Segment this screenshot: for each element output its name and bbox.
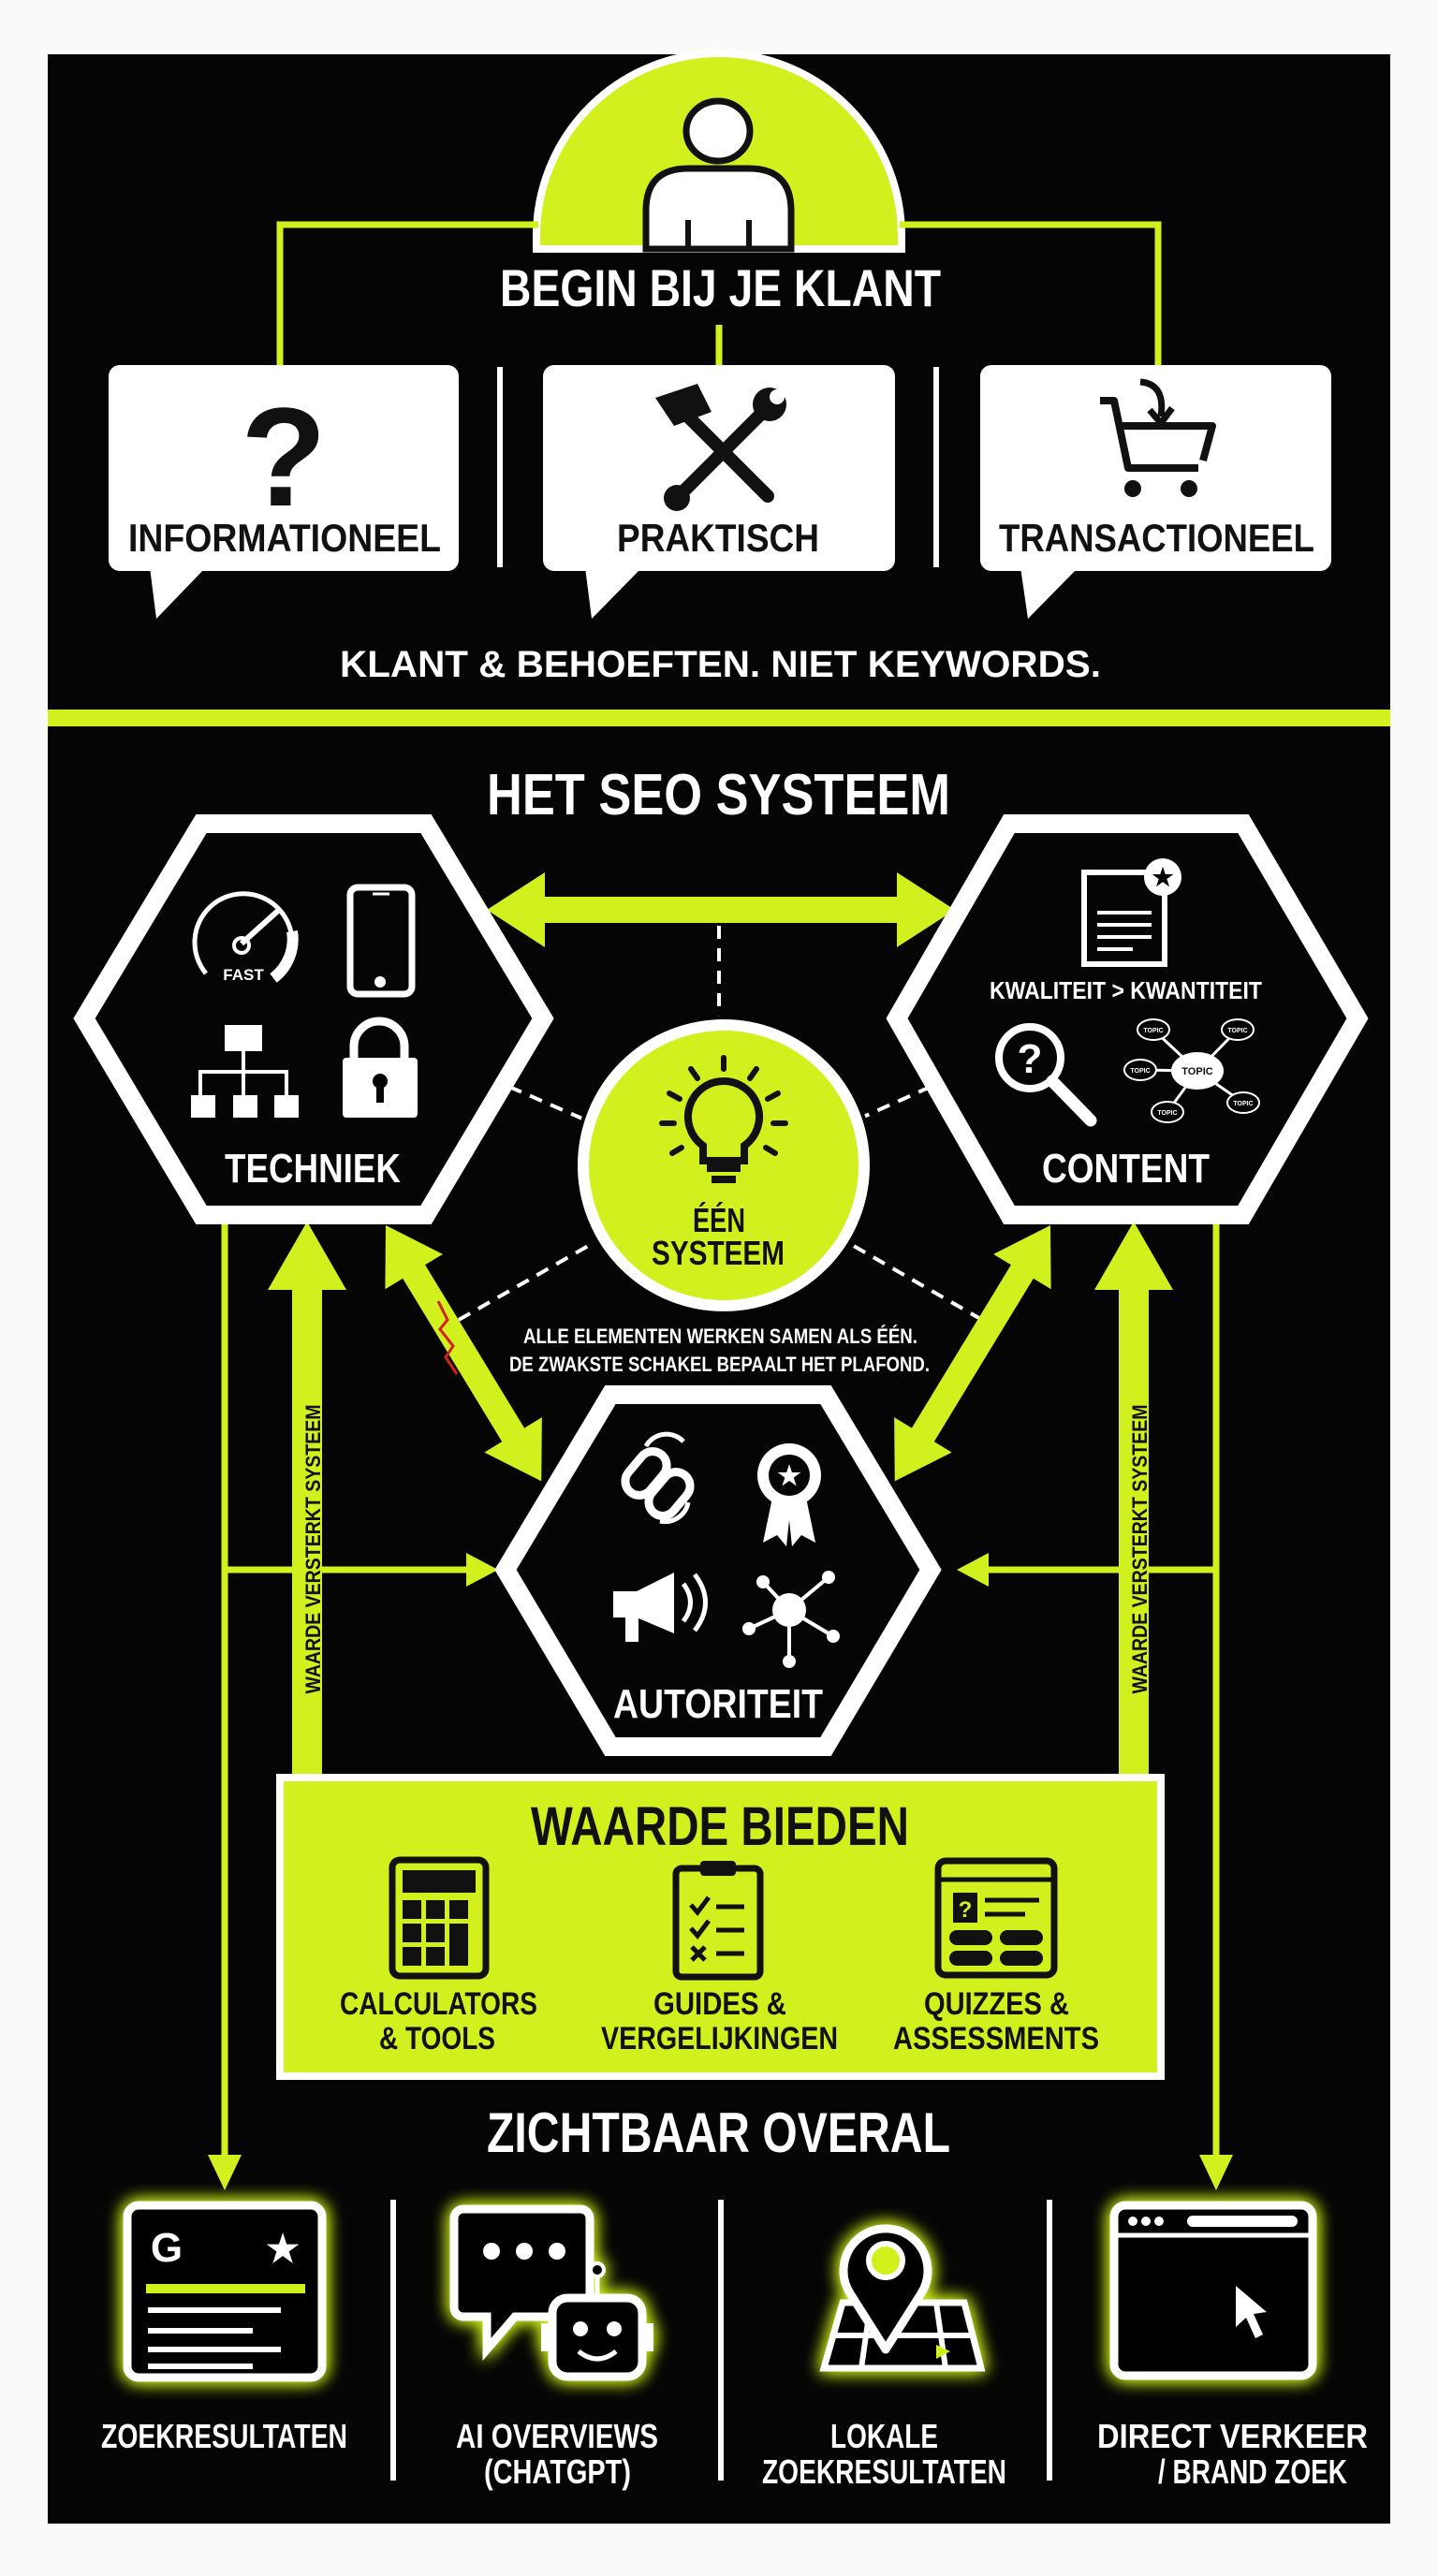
icon: speedometer — [195, 894, 293, 984]
system caption — [509, 1325, 930, 1376]
hexagon: content: KWALITEIT > KWANTITEIT — [990, 976, 1262, 1004]
waarde up arrow left — [268, 1222, 346, 1783]
system caption: ALLE ELEMENTEN WERKEN SAMEN ALS ÉÉN. — [523, 1325, 917, 1348]
panel: waarde bieden: QUIZZES & — [924, 1986, 1069, 2022]
hexagon: content: CONTENT — [1042, 1146, 1210, 1192]
icon: light bulb — [662, 1058, 785, 1183]
hexagon: content — [897, 824, 1357, 1215]
bottom labels: LOKALE — [830, 2417, 938, 2455]
icon: quiz screen — [938, 1861, 1054, 1975]
icon: phone — [350, 887, 412, 994]
panel: waarde bieden — [280, 1778, 1161, 2076]
hexagon: techniek: TECHNIEK — [225, 1146, 401, 1192]
bottom labels: / BRAND ZOEK — [1158, 2452, 1347, 2491]
icon: local map pin — [824, 2229, 981, 2368]
panel: waarde bieden: CALCULATORS — [340, 1986, 537, 2022]
icon: topic cluster: TOPIC — [1157, 1110, 1178, 1117]
heading: zichtbaar overal: ZICHTBAAR OVERAL — [487, 2101, 950, 2164]
icon: ai chat robot — [454, 2209, 653, 2377]
center circle: één systeem — [574, 1016, 873, 1315]
panel: waarde bieden: & TOOLS — [379, 2021, 495, 2056]
icon: megaphone — [613, 1573, 706, 1642]
icon: magnifier question — [999, 1027, 1091, 1120]
waarde up arrow right — [1094, 1222, 1173, 1783]
card: informationeel: INFORMATIONEEL — [128, 516, 441, 560]
icon: topic cluster: TOPIC — [1233, 1101, 1254, 1107]
center circle: één systeem: ÉÉN — [693, 1201, 745, 1239]
icon: link — [620, 1434, 696, 1522]
icon: document star: ★ — [1152, 863, 1174, 891]
panel: waarde bieden: VERGELIJKINGEN — [601, 2021, 838, 2056]
bottom labels: DIRECT VERKEER — [1097, 2417, 1368, 2455]
bottom labels: ZOEKRESULTATEN — [101, 2417, 347, 2455]
hexagon: techniek — [84, 824, 543, 1215]
arrow: content-autoriteit double — [866, 1208, 1079, 1499]
icon: quiz screen: ? — [959, 1897, 972, 1923]
icon: search results: G — [151, 2225, 183, 2271]
center circle: één systeem: SYSTEEM — [652, 1234, 785, 1272]
panel: waarde bieden: WAARDE BIEDEN — [531, 1796, 909, 1857]
thin side lines with arrows — [208, 1217, 1233, 2190]
icon: browser cursor — [1114, 2205, 1313, 2376]
card: transactioneel — [980, 365, 1331, 619]
icon: topic cluster: TOPIC — [1130, 1068, 1151, 1075]
bottom labels: ZOEKRESULTATEN — [762, 2452, 1006, 2491]
heading: het seo systeem: HET SEO SYSTEEM — [487, 763, 950, 827]
icon: lock — [343, 1021, 418, 1118]
icon: topic cluster: TOPIC — [1143, 1028, 1164, 1034]
card: praktisch: PRAKTISCH — [617, 516, 819, 560]
hexagon: autoriteit: AUTORITEIT — [613, 1681, 823, 1727]
bottom labels — [101, 2417, 1368, 2491]
panel: waarde bieden: ASSESSMENTS — [893, 2021, 1099, 2056]
card: transactioneel: TRANSACTIONEEL — [999, 516, 1314, 560]
dashed connector lines — [459, 926, 982, 1320]
icon: award badge — [757, 1443, 821, 1546]
tagline: KLANT & BEHOEFTEN. NIET KEYWORDS. — [340, 644, 1101, 685]
icon: award badge: ★ — [777, 1461, 801, 1490]
heading: begin bij je klant: BEGIN BIJ JE KLANT — [500, 258, 941, 317]
connector lines top — [280, 225, 1158, 365]
icon: search results: ★ — [266, 2229, 300, 2270]
dividers bottom — [393, 2200, 1049, 2481]
icon: search results — [127, 2205, 322, 2378]
system caption: DE ZWAKSTE SCHAKEL BEPAALT HET PLAFOND. — [509, 1353, 930, 1376]
crack mark — [438, 1301, 457, 1374]
waarde up arrow right: WAARDE VERSTERKT SYSTEEM — [1128, 1404, 1152, 1694]
icon: topic cluster: TOPIC — [1227, 1028, 1248, 1034]
icon: magnifier question: ? — [1018, 1036, 1042, 1082]
card: informationeel: ? — [241, 378, 327, 535]
icon: sitemap — [191, 1025, 299, 1118]
icon: document star — [1084, 858, 1181, 964]
icon: calculator — [392, 1860, 486, 1976]
green divider bar — [48, 710, 1390, 726]
icon: topic cluster — [1124, 1019, 1259, 1122]
panel: waarde bieden: GUIDES & — [653, 1986, 786, 2022]
icon: network — [742, 1571, 840, 1668]
icon: clipboard checklist — [676, 1861, 760, 1977]
waarde up arrow left: WAARDE VERSTERKT SYSTEEM — [301, 1404, 325, 1694]
arrow: techniek-content double — [487, 872, 955, 947]
icon: speedometer: FAST — [223, 966, 264, 984]
arrow: techniek-autoriteit double — [357, 1208, 570, 1499]
card: praktisch — [543, 365, 895, 619]
card: informationeel — [109, 365, 459, 619]
icon: topic cluster: TOPIC — [1181, 1066, 1213, 1077]
customer dome with person icon — [536, 53, 902, 249]
bottom labels: AI OVERVIEWS — [456, 2417, 658, 2455]
hexagon: autoriteit — [506, 1395, 931, 1747]
bottom labels: (CHATGPT) — [484, 2452, 631, 2491]
